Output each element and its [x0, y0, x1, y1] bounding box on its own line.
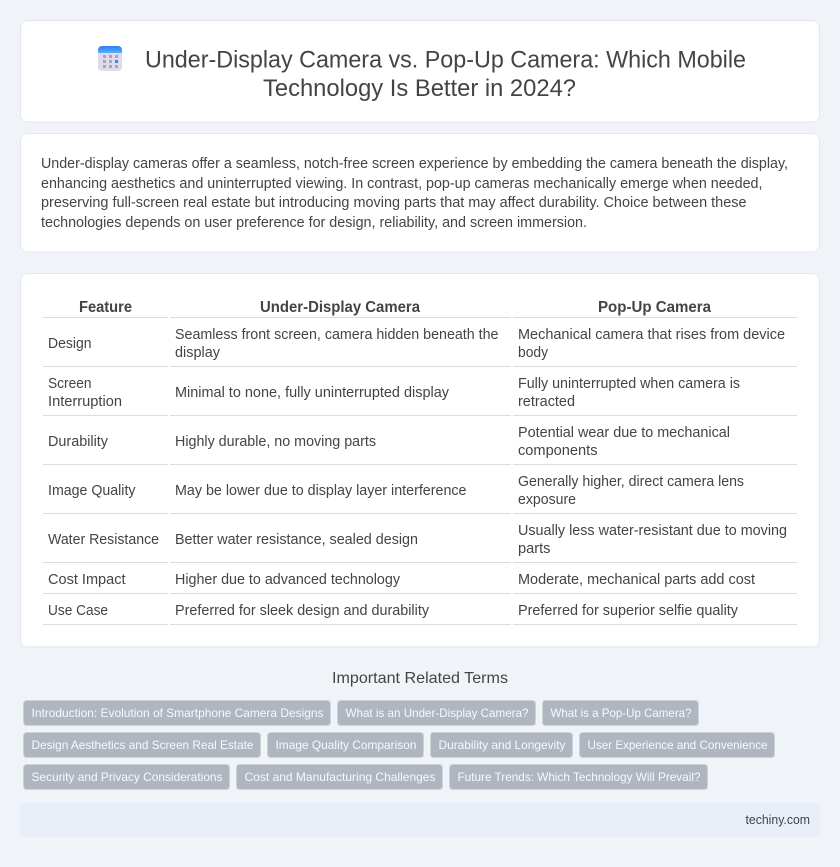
chip — [24, 732, 260, 758]
chip: Design Aesthetics and Screen Real Estate — [32, 738, 254, 752]
row: screen interruption: Screen — [48, 376, 92, 392]
intro paragraph: technologies depends on user preference for design, reliability, and screen immersion. — [41, 215, 587, 231]
intro paragraph: enhancing aesthetics and uninterrupted viewing. In contrast, pop-up cameras mechanically emerge when needed, — [41, 176, 762, 192]
title: Technology Is Better in 2024? — [263, 75, 576, 102]
row: durability: Potential wear due to mechanical — [518, 425, 730, 441]
row: use case — [43, 603, 797, 625]
chip: Future Trends: Which Technology Will Prevail? — [458, 770, 701, 784]
chip — [24, 764, 230, 790]
row: use case: Use Case — [48, 603, 108, 619]
row: image quality: May be lower due to display layer interference — [175, 483, 466, 499]
row: water resistance: parts — [518, 541, 550, 557]
row: design: Seamless front screen, camera hidden beneath the — [175, 327, 498, 343]
chip — [450, 764, 708, 790]
footer: techiny.com — [746, 813, 810, 827]
row: use case: Preferred for superior selfie quality — [518, 603, 739, 619]
row: water resistance: Water Resistance — [48, 532, 159, 548]
table header: Pop-Up Camera — [598, 299, 711, 316]
row: design: body — [518, 345, 549, 361]
panel: related term chips — [24, 700, 774, 790]
panel: title header — [20, 20, 820, 122]
row: screen interruption: retracted — [518, 394, 575, 410]
row: design: Design — [48, 336, 92, 352]
row: cost impact — [43, 572, 797, 594]
chip — [580, 732, 774, 758]
intro paragraph: Under-display cameras offer a seamless, notch-free screen experience by embedding the camera beneath the display, — [41, 156, 788, 172]
chip: Image Quality Comparison — [276, 738, 416, 752]
title — [145, 46, 746, 102]
row: cost impact: Higher due to advanced technology — [175, 572, 401, 588]
chip: Cost and Manufacturing Challenges — [244, 770, 436, 784]
chip — [338, 700, 536, 726]
row: screen interruption: Interruption — [48, 394, 122, 410]
row: image quality: Image Quality — [48, 483, 136, 499]
chip — [268, 732, 424, 758]
table header — [43, 299, 797, 318]
row: durability: Highly durable, no moving parts — [175, 434, 376, 450]
chip — [430, 732, 572, 758]
row: screen interruption — [43, 376, 797, 416]
row: cost impact: Moderate, mechanical parts add cost — [518, 572, 755, 588]
icon: calendar — [98, 46, 122, 71]
heading: important related terms: Important Related Terms — [332, 670, 508, 687]
row: design: Mechanical camera that rises from device — [518, 327, 785, 343]
row: water resistance: Better water resistance, sealed design — [175, 532, 418, 548]
row: image quality: exposure — [518, 492, 576, 508]
panel: introduction — [20, 134, 820, 252]
table header: Feature — [79, 299, 132, 316]
row: image quality: Generally higher, direct camera lens — [518, 474, 744, 490]
row: use case: Preferred for sleek design and durability — [175, 603, 430, 619]
row: image quality — [43, 474, 797, 514]
title: Under-Display Camera vs. Pop-Up Camera: Which Mobile — [145, 46, 746, 74]
chip — [542, 700, 698, 726]
row: design — [43, 327, 797, 367]
chip — [236, 764, 442, 790]
chip: What is an Under-Display Camera? — [346, 706, 529, 720]
chip: User Experience and Convenience — [588, 738, 768, 752]
row: cost impact: Cost Impact — [48, 572, 126, 588]
intro paragraph: preserving full-screen real estate but introducing moving parts that may affect durability. Choice between these — [41, 195, 746, 211]
row: screen interruption: Fully uninterrupted when camera is — [518, 376, 740, 392]
chip: Introduction: Evolution of Smartphone Camera Designs — [32, 706, 324, 720]
intro paragraph — [41, 156, 788, 231]
row: durability: Durability — [48, 434, 109, 450]
footer — [20, 803, 820, 837]
row: water resistance — [43, 523, 797, 563]
table header: Under-Display Camera — [260, 299, 420, 316]
row: water resistance: Usually less water-resistant due to moving — [518, 523, 787, 539]
chip: What is a Pop-Up Camera? — [550, 706, 692, 720]
row: screen interruption: Minimal to none, fully uninterrupted display — [175, 385, 450, 401]
chip — [24, 700, 330, 726]
panel: comparison table — [20, 274, 820, 647]
chip: Security and Privacy Considerations — [32, 770, 222, 784]
row: durability: components — [518, 443, 598, 459]
row: durability — [43, 425, 797, 465]
row: design: display — [175, 345, 221, 361]
chip: Durability and Longevity — [438, 738, 566, 752]
